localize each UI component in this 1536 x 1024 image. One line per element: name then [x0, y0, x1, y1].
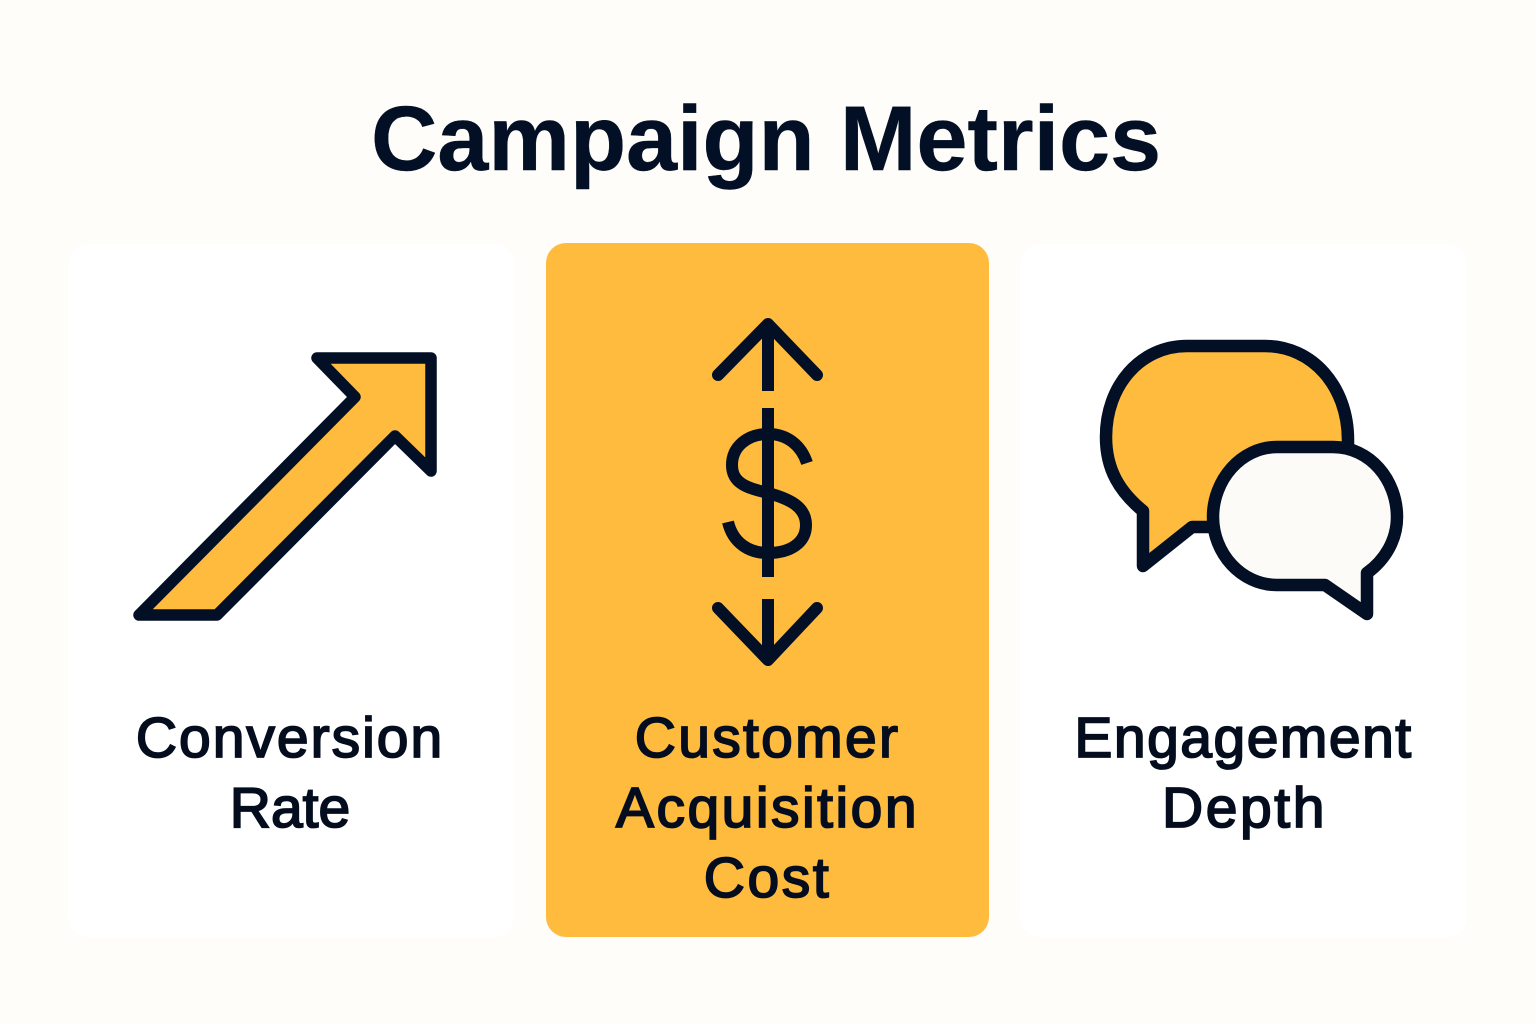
label: engagement depth — [1074, 706, 1413, 840]
label: conversion rate: Rate — [230, 776, 350, 840]
label: engagement depth: Depth — [1162, 776, 1327, 840]
panel: engagement depth — [1020, 244, 1467, 937]
panel: conversion rate — [68, 244, 514, 937]
title: Campaign Metrics — [371, 88, 1161, 190]
label: customer acquisition cost — [614, 706, 919, 910]
label: customer acquisition cost: Customer — [635, 706, 900, 770]
label: conversion rate — [136, 706, 444, 840]
panel: customer acquisition cost — [546, 243, 989, 937]
label: customer acquisition cost: Acquisition — [616, 776, 919, 840]
label: customer acquisition cost: Cost — [704, 846, 831, 910]
label: engagement depth: Engagement — [1074, 706, 1413, 770]
label: conversion rate: Conversion — [136, 706, 444, 770]
